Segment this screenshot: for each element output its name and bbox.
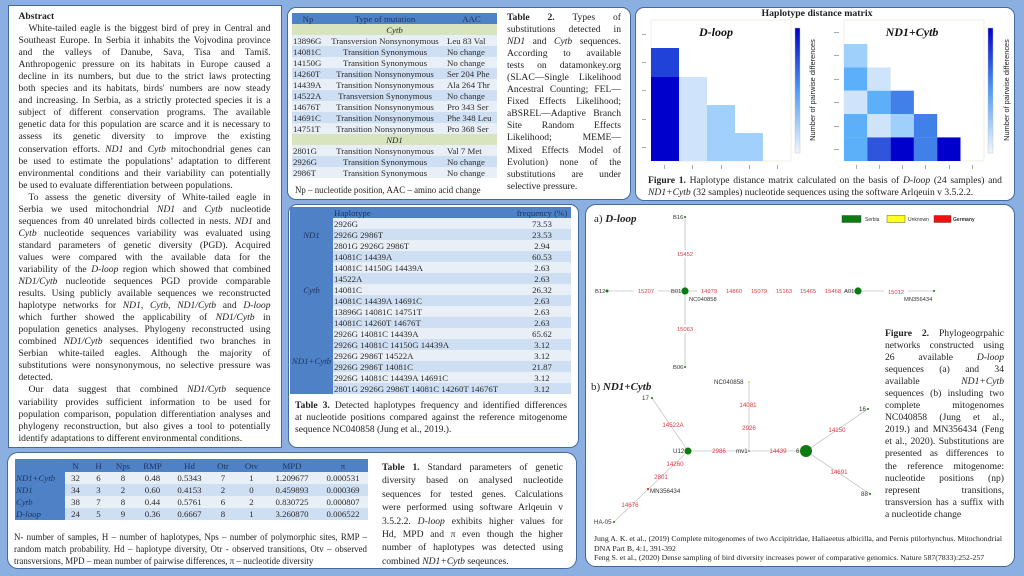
table 3: haplotype frequency: 2.63 — [534, 296, 550, 306]
table 3: haplotype frequency: 2926G 2986T 14522A — [334, 350, 414, 360]
abstract text: assess its genetic diversity to improve the existing — [18, 131, 270, 142]
table 2: types of substitutions: Phe 348 Leu — [447, 112, 491, 122]
table 1: genetic diversity parameters: 3.260870 — [276, 509, 308, 519]
table 1: genetic diversity parameters: 0.000369 — [326, 485, 360, 495]
abstract text: White-tailed eagle is the biggest bird of prey in Central and — [28, 23, 270, 34]
table 1: genetic diversity parameters: RMP — [143, 460, 162, 470]
figure 2 caption: 2019.) and MN356434 (Feng — [885, 424, 1004, 435]
table 2: types of substitutions: Transition Nonsynonymous — [336, 80, 434, 90]
figure 2 caption: sequences (b) insluding two — [885, 388, 1004, 399]
table 3: haplotype frequency: ND1+Cytb — [292, 356, 331, 366]
table 2: types of substitutions: No change — [447, 168, 485, 178]
panel: figure 2 — [585, 204, 1015, 567]
figure 2 caption: represent transitions, — [885, 485, 1004, 496]
table 2 caption — [506, 12, 622, 192]
table 2 caption: (SLAC—Single Likelihood — [507, 72, 621, 83]
network b: ND1+Cytb: 2986 — [712, 448, 726, 455]
table 1: genetic diversity parameters: 8 — [121, 497, 125, 507]
network b: ND1+Cytb: 17 — [642, 395, 649, 402]
table 2: types of substitutions: 13896G — [293, 36, 321, 46]
abstract text: Our data suggest that combined ND1/Cytb sequence — [28, 384, 270, 395]
table 1: genetic diversity parameters: 32 — [71, 473, 80, 483]
abstract text: To assess the genetic diversity of White-tailed eagle in — [28, 192, 270, 203]
table 1: genetic diversity parameters: 0 — [249, 485, 254, 495]
references: Jung A. K. et al., (2019) Complete mitogenomes of two Accipitridae, Haliaeetus albicilla, and Pernis ptilorhynchus. Mitochondrial — [594, 534, 1002, 543]
table 1: genetic diversity parameters: 2 — [249, 497, 254, 507]
table 3: haplotype frequency: 3.12 — [534, 384, 550, 394]
table 1: genetic diversity parameters: 24 — [71, 509, 80, 519]
network a: D-loop: Germany — [953, 217, 975, 223]
table 3: haplotype frequency: 2.63 — [534, 274, 550, 284]
abstract text: genetic data for this population are scarce and it is necessary to — [18, 119, 270, 130]
table 3: haplotype frequency: 13896G 14081C 14751T — [334, 306, 422, 316]
table 2: types of substitutions: Cytb — [386, 24, 403, 34]
table 3: haplotype frequency: Cytb — [303, 284, 320, 294]
network b: ND1+Cytb: 6 — [796, 448, 800, 455]
abstract text: variability provides sufficient information to be used for — [18, 396, 270, 408]
table 1 caption: combined ND1+Cytb seqeunces. — [382, 556, 509, 567]
table 1: genetic diversity parameters: 8 — [221, 509, 225, 519]
network a: D-loop: 15163 — [776, 289, 792, 295]
table 2: types of substitutions: Ser 204 Phe — [447, 68, 490, 78]
table 2 caption: Ancestral Counting; FEL— — [507, 84, 621, 95]
network b: ND1+Cytb: 14150 — [828, 427, 846, 434]
table 3 caption: Table 3. Detected haplotypes frequency and identified differences — [295, 400, 567, 411]
abstract text: and the valleys of Danube, Sava, Tisa and Tamiš. — [18, 47, 270, 58]
network a: D-loop: Unknown — [908, 217, 929, 223]
table 2 caption: selective pressure. — [507, 181, 577, 192]
table 2: types of substitutions: Val 7 Met — [447, 146, 482, 156]
table 2 caption: Likelihood; MEME— — [507, 132, 621, 143]
references: DNA Part B, 4:1, 391-392 — [594, 544, 676, 552]
table 1: genetic diversity parameters: N — [72, 460, 79, 470]
network b: ND1+Cytb: 2801 — [654, 474, 668, 481]
references: Feng S. et al., (2020) Dense sampling of bird diversity increases power of comparative genomics. Nature 587(7833):252-257 — [594, 553, 984, 562]
table 2: types of substitutions: Transition Nonsynonymous — [336, 102, 434, 112]
table 1: genetic diversity parameters: 6 — [221, 497, 225, 507]
figure 2 caption: the reference mitogenome: — [885, 461, 1004, 472]
abstract text: Serbian white-tailed eagles. Although the majority of — [18, 348, 270, 359]
network a: D-loop: 15207 — [638, 289, 654, 295]
network b: ND1+Cytb — [591, 379, 871, 526]
table 3: haplotype frequency: 14081C 14439A — [334, 252, 392, 262]
table 1: genetic diversity parameters: 2 — [221, 485, 225, 495]
table 2: types of substitutions: Transition Nonsynonymous — [336, 124, 434, 134]
chart: D-loop heatmap: Number of pairwise differences — [808, 39, 817, 141]
table 2 caption: Table 2. Types of — [507, 12, 621, 23]
abstract text: be used to estimate the populations’ adaptation to different — [18, 156, 270, 167]
table 2: types of substitutions — [292, 13, 497, 178]
table 3: haplotype frequency: 14081C — [334, 284, 362, 294]
table 3: haplotype frequency: 3.12 — [534, 340, 550, 350]
table 1 caption: were performed using software Arlqeuin v — [382, 502, 563, 513]
figure 1 caption: Figure 1. Haplotype distance matrix calculated on the basis of D-loop (24 samples) and — [648, 175, 1002, 186]
table 3: haplotype frequency: 65.62 — [532, 328, 552, 338]
table 1: genetic diversity parameters: Nps — [116, 460, 130, 470]
network a: D-loop: B01 — [671, 289, 681, 295]
figure 2 caption: nucleotide positions (np) — [885, 473, 1004, 484]
network a: D-loop: A01 — [844, 289, 854, 295]
figure 2 caption — [885, 328, 1004, 520]
table 1: genetic diversity parameters: 0.5343 — [177, 473, 202, 483]
table 1: genetic diversity parameters: 0.006522 — [326, 509, 360, 519]
table 1: genetic diversity parameters: 7 — [96, 497, 101, 507]
table 3: haplotype frequency: 2926G 2986T — [334, 230, 383, 240]
table 1: genetic diversity parameters: 1 — [249, 473, 254, 483]
table 1: genetic diversity parameters: ND1 — [16, 485, 33, 495]
network b: ND1+Cytb: 14081 — [739, 402, 757, 409]
table 1 caption: number of haplotypes was detected using — [382, 542, 563, 553]
network b: ND1+Cytb: 2926 — [742, 425, 756, 432]
network a: D-loop: 15079 — [751, 289, 767, 295]
table 1 caption: Table 1. Standard parameters of genetic — [382, 462, 563, 473]
table 3: haplotype frequency: 14081C 14150G 14439A — [334, 262, 423, 272]
panel: figure 1 — [635, 7, 1015, 201]
table 1: genetic diversity parameters: π — [341, 460, 345, 470]
network a: D-loop: MN356434 — [904, 297, 933, 303]
abstract text: subject of different conservation programs. The available — [18, 107, 270, 118]
table 1: genetic diversity parameters: 0.830725 — [276, 497, 308, 507]
table 1: genetic diversity parameters: Otv — [245, 460, 258, 470]
table 2: types of substitutions: Type of mutation — [355, 14, 415, 24]
network b: ND1+Cytb: mv1 — [736, 448, 748, 455]
network a: D-loop: 14860 — [726, 289, 742, 295]
table 1: genetic diversity parameters: 0.000531 — [326, 473, 360, 483]
network b: ND1+Cytb: 14260 — [666, 461, 684, 468]
table 3: haplotype frequency: ND1 — [303, 230, 320, 240]
table 3: haplotype frequency: 2926G — [334, 218, 358, 228]
table 2: types of substitutions: Transition Synonymous — [343, 46, 427, 56]
table 2: types of substitutions: 14676T — [293, 102, 320, 112]
abstract text: both species and its habitats, birds' numbers are now steady — [18, 83, 270, 94]
table 2: types of substitutions: 14150G — [293, 58, 321, 68]
abstract text: population genetics analyses. Phylogeny reconstructed using — [18, 324, 270, 335]
table 1 abbreviations note: transversions, MPD – mean number of pairwise differences, π – nucleotide diversity — [14, 556, 313, 566]
network b: ND1+Cytb: b) ND1+Cytb — [591, 381, 652, 393]
abstract text: results. Using publicly available sequences we reconstructed — [18, 288, 270, 299]
table 3: haplotype frequency: frequency (%) — [517, 208, 567, 218]
table 1: genetic diversity parameters: 0.44 — [145, 497, 160, 507]
figure 1 title: Haplotype distance matrix — [761, 8, 873, 19]
network a: D-loop: a) D-loop — [594, 213, 637, 225]
abstract text: detected. — [18, 372, 53, 383]
abstract text: identify adaptations to different environmental conditions. — [18, 433, 242, 444]
table 2: types of substitutions: No change — [447, 58, 485, 68]
table 2: types of substitutions: No change — [447, 156, 485, 166]
table 3: haplotype frequency: 14081C 14260T 14676T — [334, 318, 421, 328]
abstract text: Abstract — [18, 11, 54, 22]
abstract text: variability of the D-loop region which showed that combined — [18, 264, 270, 275]
table 2: types of substitutions: 2986T — [293, 168, 316, 178]
table 2 caption: substitutions are under — [507, 169, 621, 180]
figure 1 caption: ND1+Cytb (32 samples) nucleotide sequences using the software Arlqeuin v 3.5.2.2. — [648, 187, 973, 198]
table 3: haplotype frequency: 23.53 — [532, 230, 552, 240]
network b: ND1+Cytb: MN356434 — [650, 488, 681, 495]
table 3: haplotype frequency: 21.87 — [532, 362, 552, 372]
figure 2 caption: complete mitogenomes — [885, 400, 1004, 411]
table 2 caption: Site Random Effects — [507, 120, 621, 131]
table 3 caption: sequence NC040858 (Jung et al., 2019.). — [295, 424, 451, 435]
table 1 abbreviations note: N- number of samples, H – number of haplotypes, Nps – number of polymorphic sites, RMP – — [14, 532, 367, 542]
table 3: haplotype frequency — [290, 207, 571, 394]
table 1 caption: 3.5.2.2. D-loop exhibits higher values for — [382, 516, 563, 527]
table 2 caption: According to available — [507, 48, 621, 59]
table 2 caption: Evolution) none of the — [507, 157, 621, 168]
network b: ND1+Cytb: 14691 — [830, 469, 848, 476]
abstract text: environmental conditions and their variability can potentially — [18, 168, 270, 179]
table 3: haplotype frequency: 73.53 — [532, 218, 552, 228]
network a: D-loop — [594, 213, 975, 371]
network b: ND1+Cytb: 14676 — [621, 502, 639, 509]
abstract text: Anthropogenic pressure on its habitats in Europe caused a — [18, 59, 270, 70]
network a: D-loop: 15465 — [800, 289, 816, 295]
panel: table 1 — [7, 452, 577, 569]
table 2: types of substitutions: Transition Nonsynonymous — [336, 68, 434, 78]
figure 2 caption: sequences (a) and 34 — [885, 364, 1004, 375]
abstract text: ND1/Cytb nucleotide sequences PGD provide comparable — [18, 276, 270, 287]
table 3: haplotype frequency: 3.12 — [534, 372, 550, 382]
table 2: types of substitutions: 14260T — [293, 68, 320, 78]
table 1: genetic diversity parameters: Hd — [184, 460, 195, 470]
table 2 caption: substitutions detected in — [507, 24, 621, 35]
table 1: genetic diversity parameters: 5 — [96, 509, 101, 519]
chart: D-loop heatmap: D-loop — [698, 25, 733, 39]
network b: ND1+Cytb: HA-05 — [594, 519, 612, 526]
panel: table 3 — [288, 204, 579, 448]
table 3: haplotype frequency: 3.12 — [534, 350, 550, 360]
table 2: types of substitutions: Pro 368 Ser — [447, 124, 489, 134]
table 2: types of substitutions: No change — [447, 90, 485, 100]
network a: D-loop: 15468 — [825, 289, 841, 295]
network a: D-loop: 15063 — [677, 327, 693, 333]
table 1: genetic diversity parameters: 6 — [96, 473, 101, 483]
table 2 caption: ND1 and Cytb sequences. — [507, 36, 621, 47]
network b: ND1+Cytb: 14439 — [769, 448, 787, 455]
table 1 abbreviations note: random match probability. Hd – haplotype diversity, Otr - observed transitions, Otv – observed — [14, 544, 367, 554]
table 1: genetic diversity parameters: MPD — [282, 460, 302, 470]
references — [594, 534, 1002, 562]
table 2: types of substitutions: Pro 343 Ser — [447, 102, 489, 112]
table 2: types of substitutions: 14691C — [293, 112, 321, 122]
table 2 caption: tests on datamonkey.org — [507, 60, 621, 71]
abstract text: Cytb nucleotide sequences variability was evaluated using — [18, 228, 270, 239]
table 1 caption: Hd, MPD and π even though the higher — [382, 529, 563, 540]
table 2: types of substitutions: ND1 — [386, 134, 403, 144]
table 1: genetic diversity parameters: 7 — [221, 473, 225, 483]
table 1: genetic diversity parameters: D-loop — [16, 509, 41, 519]
table 2: types of substitutions: 14522A — [293, 90, 321, 100]
table 1: genetic diversity parameters: ND1+Cytb — [16, 473, 55, 483]
table 3: haplotype frequency: 26.32 — [532, 284, 552, 294]
table 2: types of substitutions: 14751T — [293, 124, 320, 134]
abstract text: sequences from 40 unrelated birds collected in nests. ND1 and — [18, 216, 270, 227]
chart: ND1+Cytb heatmap: Number of pairwise differences — [1002, 39, 1011, 141]
table 3: haplotype frequency: 2.63 — [534, 318, 550, 328]
table 1 caption: diversity based on analysed nucleotide — [382, 475, 563, 486]
network b: ND1+Cytb: 16 — [859, 406, 866, 413]
table 2: types of substitutions: 14081C — [293, 46, 321, 56]
abstract text: and increasing. In Serbia, as a strictly protected species it is a — [18, 95, 270, 106]
table 3: haplotype frequency: 2926G 14081C 14150G 14439A — [334, 340, 449, 350]
table 1: genetic diversity parameters: H — [95, 460, 102, 470]
table 3: haplotype frequency: 14081C 14439A 14691C — [334, 296, 422, 306]
chart: ND1+Cytb heatmap — [834, 20, 1011, 169]
abstract text: haplotype networks for ND1, Cytb, ND1/Cytb and D-loop — [18, 300, 271, 311]
table 2 caption: Mixed Effects Model of — [507, 145, 621, 156]
abstract text: phylogeny reconstruction, but also gives a tool to potentially — [18, 421, 270, 432]
figure 2 caption: available ND1+Cytb — [885, 376, 1004, 387]
abstract text: Serbia we used mitochondrial ND1 and Cytb nucleotide — [18, 204, 270, 215]
figure 2 caption: networks constructed using — [885, 340, 1004, 351]
table 1 abbreviations note — [14, 532, 367, 566]
chart: ND1+Cytb heatmap: ND1+Cytb — [885, 25, 938, 39]
abstract text: values were compared with the available data for the — [18, 252, 270, 263]
table 1: genetic diversity parameters — [15, 459, 368, 520]
table 2: types of substitutions: No change — [447, 46, 485, 56]
table 3: haplotype frequency: Haplotype — [334, 208, 371, 218]
table 1: genetic diversity parameters: 0.4153 — [177, 485, 202, 495]
table 2: types of substitutions: 2926G — [293, 156, 317, 166]
abstract text: standard parameters of genetic diversity (PGD). Acquired — [18, 240, 270, 251]
network b: ND1+Cytb: 14522A — [662, 422, 685, 429]
table 2: types of substitutions: Transversion Synonymous — [338, 90, 432, 100]
figure 2 caption: presented as differences to — [885, 448, 1004, 459]
table 2 abbreviations note: Np – nucleotide position, AAC – amino acid change — [295, 185, 481, 195]
table 1: genetic diversity parameters: 34 — [71, 485, 80, 495]
table 2: types of substitutions: 2801G — [293, 146, 317, 156]
table 1 caption — [382, 462, 564, 567]
abstract text: combined ND1/Cytb sequences identified two branches in — [18, 336, 270, 347]
table 2: types of substitutions: Transversion Nonsynonymous — [331, 36, 439, 46]
table 1: genetic diversity parameters: 1.209677 — [276, 473, 308, 483]
table 1: genetic diversity parameters: 9 — [121, 509, 125, 519]
network a: D-loop: 15452 — [677, 252, 693, 258]
table 3: haplotype frequency: 2801G 2926G 2986T 14081C 14260T 14676T — [334, 384, 498, 394]
panel: table 2 — [287, 7, 631, 200]
table 3: haplotype frequency: 2926G 14081C 14439A — [334, 328, 419, 338]
network a: D-loop: Serbia — [865, 217, 880, 223]
network b: ND1+Cytb: NC040858 — [714, 379, 744, 386]
network a: D-loop: NC040858 — [689, 297, 717, 303]
figure 2 caption: transversion has a suffix with — [885, 497, 1004, 508]
table 1: genetic diversity parameters: 0.6667 — [177, 509, 202, 519]
table 1: genetic diversity parameters: Otr — [217, 460, 229, 470]
table 3: haplotype frequency: 60.53 — [532, 252, 552, 262]
table 2: types of substitutions: AAC — [462, 14, 481, 24]
table 1: genetic diversity parameters: Cytb — [16, 497, 33, 507]
abstract text: conservation efforts. ND1 and Cytb mitochondrial genes can — [18, 144, 270, 155]
table 1: genetic diversity parameters: 3 — [96, 485, 101, 495]
network a: D-loop: B12 — [595, 289, 605, 295]
figure 2 caption: 26 available D-loop — [885, 352, 1004, 363]
chart: D-loop heatmap — [642, 20, 817, 169]
table 3: haplotype frequency: 2.63 — [534, 306, 550, 316]
abstract text: substitutions were nonsynonymous, no selective pressure was — [18, 360, 270, 371]
table 3 caption: at nucleotide positions compared against the reference mitogenome — [295, 412, 567, 423]
table 3: haplotype frequency: 2.63 — [534, 262, 550, 272]
abstract text — [18, 11, 271, 444]
abstract text: population comparison, population differentiation analyses and — [18, 409, 270, 420]
table 1: genetic diversity parameters: 1 — [249, 509, 254, 519]
figure 2 caption: Figure 2. Phylogeogrpahic — [885, 328, 1004, 339]
table 2: types of substitutions: Leu 83 Val — [447, 36, 485, 46]
abstract text: which further showed the applicability of ND1/Cytb in — [18, 312, 270, 323]
table 3: haplotype frequency: 14522A — [334, 274, 362, 284]
table 2: types of substitutions: Transition Nonsynonymous — [336, 146, 434, 156]
table 1: genetic diversity parameters: 38 — [71, 497, 80, 507]
table 1: genetic diversity parameters: 0.48 — [145, 473, 160, 483]
table 1: genetic diversity parameters: 2 — [121, 485, 125, 495]
network b: ND1+Cytb: 88 — [861, 491, 868, 498]
table 1: genetic diversity parameters: 0.60 — [145, 485, 160, 495]
table 1 caption: sequences for tested genes. Calculations — [382, 489, 563, 500]
abstract text: Southeast Europe. In Serbia it inhabits the Vojvodina province — [18, 35, 270, 46]
network a: D-loop: B06 — [673, 365, 683, 371]
table 3: haplotype frequency: 2926G 14081C 14439A 14691C — [334, 372, 448, 382]
table 1: genetic diversity parameters: 0.5761 — [177, 497, 202, 507]
figure 1 caption — [648, 175, 1002, 198]
abstract text: decline in its numbers, but due to the strict laws protecting — [18, 71, 270, 82]
network a: D-loop: B16 — [673, 215, 683, 221]
table 2 caption: aBSREL—Adaptive Branch — [507, 108, 621, 119]
figure 2 caption: NC040858 (Jung et al., — [885, 412, 1004, 423]
table 3: haplotype frequency: 2926G 2986T 14081C — [334, 362, 413, 372]
table 1: genetic diversity parameters: 8 — [121, 473, 125, 483]
figure 2 caption: et al., 2020). Substitutions are — [885, 436, 1004, 447]
table 3: haplotype frequency: 2801G 2926G 2986T — [334, 240, 409, 250]
network a: D-loop: 15012 — [888, 290, 904, 296]
abstract text: be used to evaluate differentiation between populations. — [18, 180, 233, 191]
table 2: types of substitutions: Transition Synonymous — [343, 168, 427, 178]
table 2 caption: Fixed Effects Likelihood; — [507, 96, 621, 107]
table 2: types of substitutions: Ala 264 Thr — [447, 80, 490, 90]
table 1: genetic diversity parameters: 0.459893 — [276, 485, 308, 495]
table 1: genetic diversity parameters: 0.36 — [145, 509, 160, 519]
table 2: types of substitutions: 14439A — [293, 80, 321, 90]
table 3 caption — [295, 400, 567, 435]
network b: ND1+Cytb: U12 — [673, 448, 685, 455]
table 2: types of substitutions: Transition Synonymous — [343, 156, 427, 166]
panel: abstract — [8, 5, 282, 448]
network a: D-loop: 14979 — [701, 289, 717, 295]
table 3: haplotype frequency: 2.94 — [534, 240, 550, 250]
figure 2 caption: a nucleotide change — [885, 509, 961, 520]
table 1: genetic diversity parameters: 0.000807 — [326, 497, 360, 507]
table 2: types of substitutions: Transition Nonsynonymous — [336, 112, 434, 122]
table 2: types of substitutions: Np — [303, 14, 313, 24]
table 2: types of substitutions: Transition Synonymous — [343, 58, 427, 68]
